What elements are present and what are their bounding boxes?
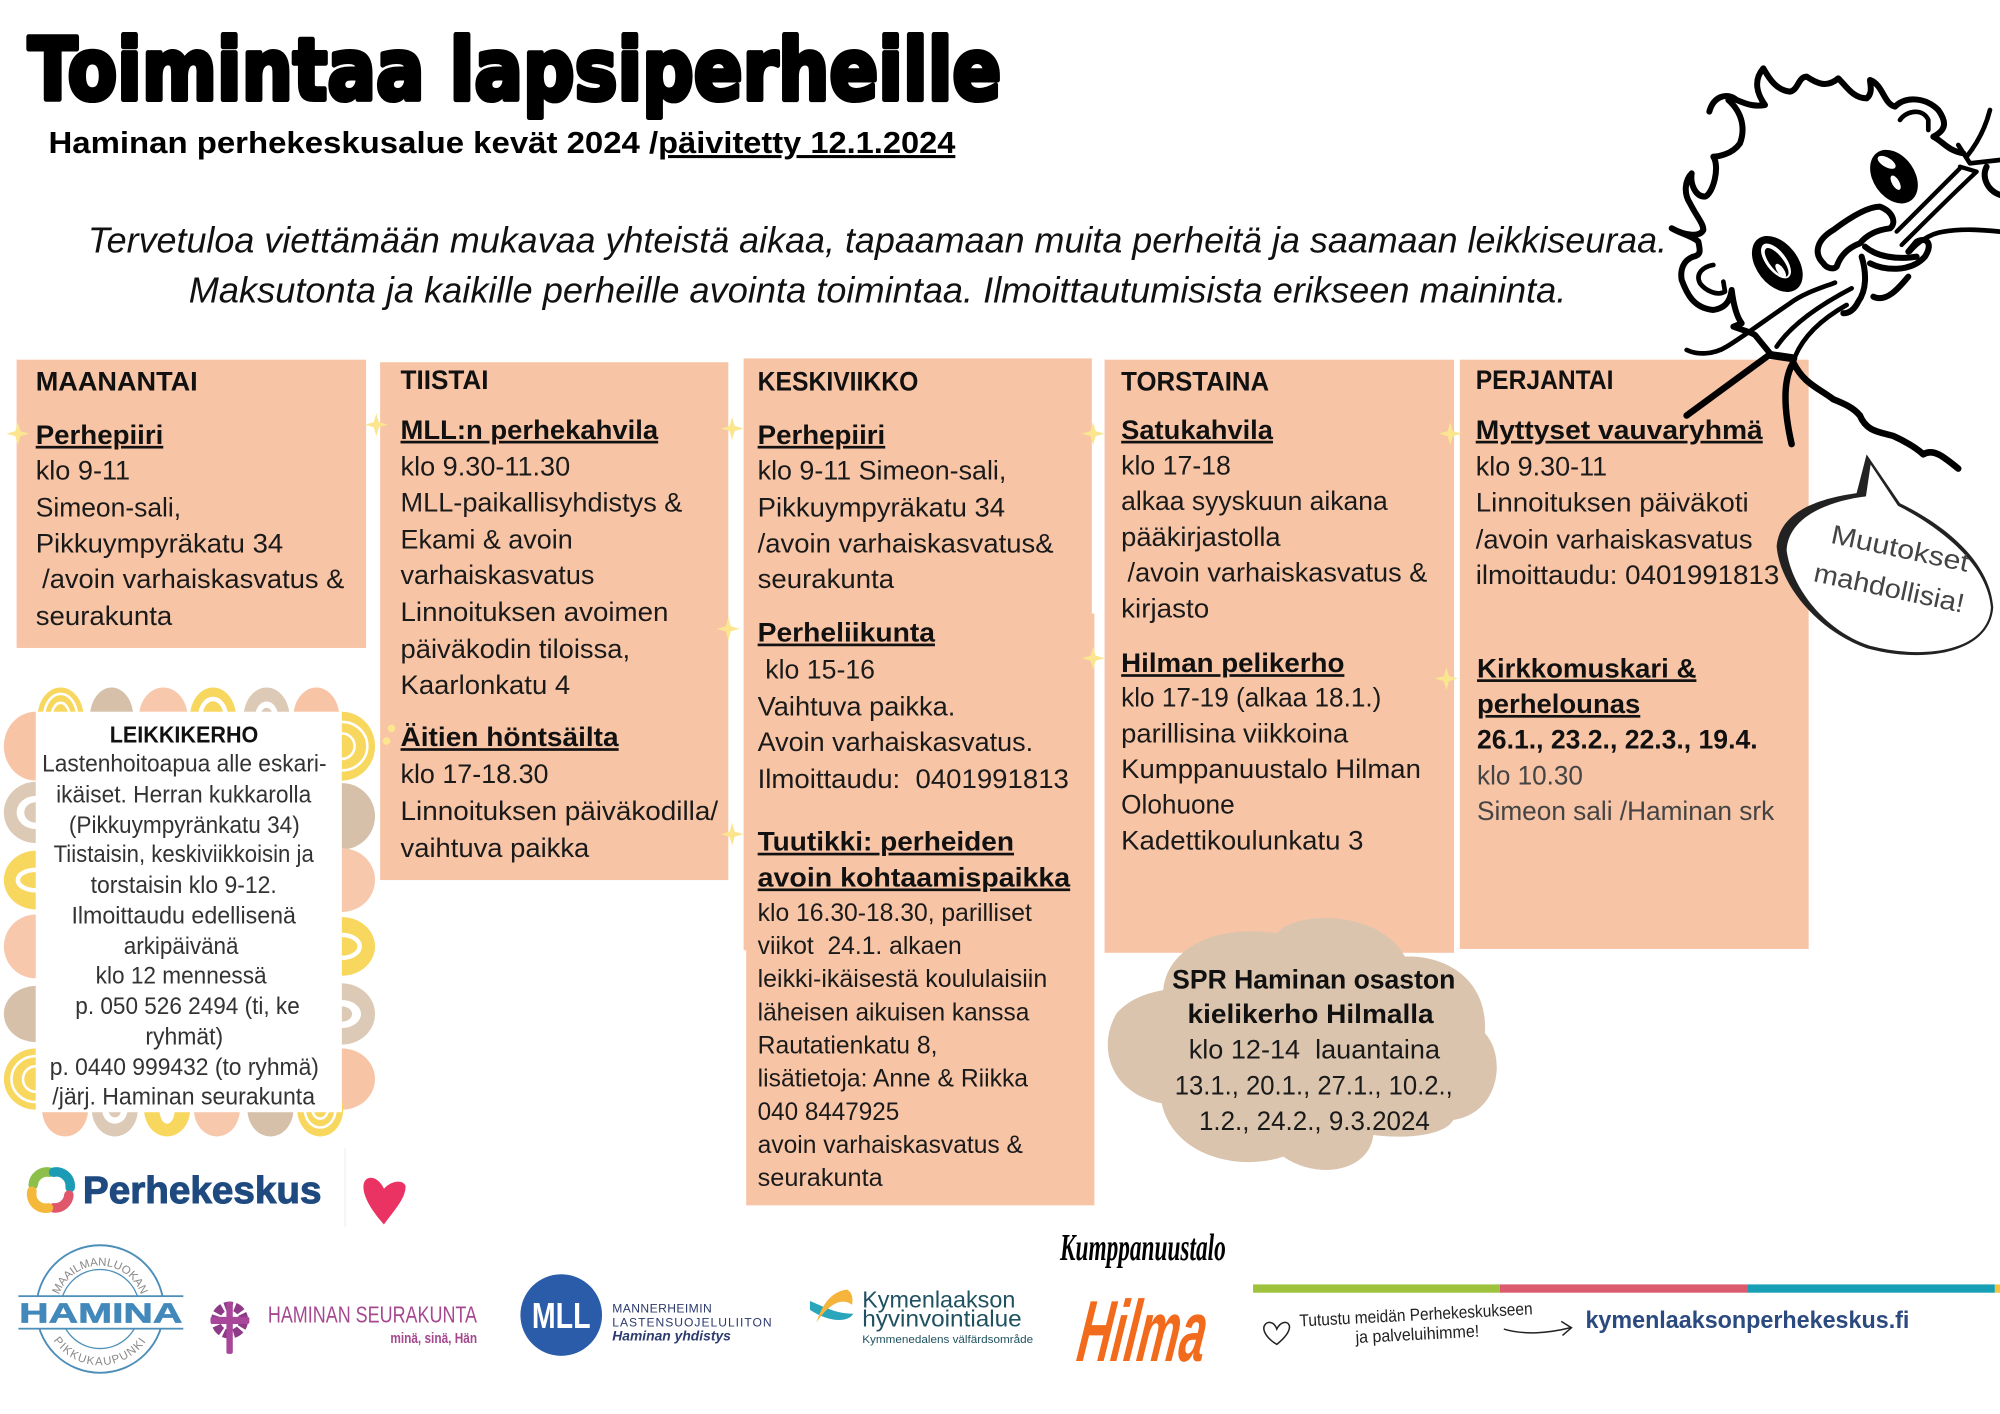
logo: Kumppanuustalo Hilma (1059, 1227, 1226, 1380)
logo: Kymenlaakson hyvinvointialue: hyvinvointialue (862, 1306, 1022, 1332)
panel: perjantai: klo 9.30-11 (1476, 452, 1607, 482)
panel: torstaina: /avoin varhaiskasvatus & (1128, 558, 1427, 588)
panel: keskiviikko: avoin varhaiskasvatus & (758, 1131, 1023, 1159)
panel: keskiviikko: lisätietoja: Anne & Riikka (758, 1065, 1028, 1093)
website banner: ja palveluihimme! (1354, 1321, 1480, 1347)
panel: leikkikerho: Lastenhoitoapua alle eskari- (42, 751, 327, 777)
panel: perjantai: 26.1., 23.2., 22.3., 19.4. (1477, 725, 1758, 755)
logo: Kymenlaakson hyvinvointialue: Kymmenedalens välfärdsområde (862, 1334, 1033, 1346)
panel: tiistai (380, 362, 728, 880)
panel: tiistai: Linnoituksen avoimen (401, 597, 668, 627)
logo: Haminan seurakunta: HAMINAN SEURAKUNTA (268, 1302, 478, 1328)
panel: keskiviikko: Perhepiiri (758, 420, 885, 450)
panel: tiistai: Kaarlonkatu 4 (401, 670, 570, 700)
website banner (1253, 1284, 2000, 1347)
logo: Kymenlaakson hyvinvointialue: Kymenlaakson (862, 1286, 1015, 1312)
logo: Hamina: PIKKUKAUPUNKI (54, 1336, 146, 1366)
logo: MLL (520, 1274, 772, 1356)
panel: torstaina: parillisina viikkoina (1121, 718, 1348, 748)
panel: leikkikerho: Ilmoittaudu edellisenä (71, 902, 297, 928)
panel: tiistai: klo 9.30-11.30 (401, 452, 570, 482)
panel: keskiviikko: seurakunta (758, 564, 894, 594)
website banner: Tutustu meidän Perhekeskukseen (1299, 1298, 1533, 1330)
panel: keskiviikko: klo 15-16 (765, 655, 875, 685)
panel: tiistai: vaihtuva paikka (401, 833, 589, 863)
logo: MLL: MANNERHEIMIN (612, 1301, 712, 1315)
panel: keskiviikko: Avoin varhaiskasvatus. (758, 727, 1033, 757)
panel: perjantai: /avoin varhaiskasvatus (1476, 524, 1753, 554)
callout: speech bubble (1777, 454, 1993, 655)
panel: keskiviikko: klo 16.30-18.30, parilliset (758, 899, 1032, 927)
panel: torstaina: klo 17-18 (1121, 450, 1231, 480)
panel: leikkikerho: LEIKKIKERHO (110, 721, 258, 747)
website banner: kymenlaaksonperhekeskus.fi (1585, 1307, 1909, 1334)
panel: leikkikerho (4, 687, 375, 1136)
panel: tiistai: Linnoituksen päiväkodilla/ (401, 796, 719, 826)
panel: leikkikerho: (Pikkuympyränkatu 34) (69, 812, 300, 838)
panel: tiistai: klo 17-18.30 (401, 759, 548, 789)
icon: sparkle stars (6, 413, 1462, 846)
panel: perjantai (1460, 360, 1809, 949)
icon: heart (344, 1148, 406, 1227)
panel: torstaina: Kumppanuustalo Hilman (1121, 754, 1421, 784)
panel: leikkikerho: arkipäivänä (124, 933, 239, 959)
panel: keskiviikko: leikki-ikäisestä koululaisiin (758, 965, 1047, 993)
panel: perjantai: PERJANTAI (1476, 365, 1614, 395)
panel: keskiviikko: Vaihtuva paikka. (758, 692, 955, 722)
panel: maanantai: Perhepiiri (36, 420, 163, 450)
panel: keskiviikko: /avoin varhaiskasvatus& (758, 528, 1054, 558)
subtitle (48, 126, 955, 160)
callout: SPR cloud: 1.2., 24.2., 9.3.2024 (1199, 1106, 1430, 1136)
logo: MLL: MLL (532, 1296, 591, 1336)
panel: tiistai: Äitien höntsäilta (401, 722, 620, 752)
panel: keskiviikko: Rautatienkatu 8, (758, 1032, 938, 1060)
panel: keskiviikko: avoin kohtaamispaikka (758, 862, 1071, 892)
panel: tiistai: päiväkodin tiloissa, (401, 634, 630, 664)
callout: SPR cloud: klo 12-14 lauantaina (1189, 1035, 1440, 1065)
panel: perjantai: perhelounas (1477, 689, 1640, 719)
callout: SPR cloud: 13.1., 20.1., 27.1., 10.2., (1175, 1070, 1453, 1100)
callout: speech bubble: Muutokset (1828, 519, 1973, 578)
panel: maanantai: klo 9-11 (36, 456, 130, 486)
logo: Perhekeskus: Perhekeskus (83, 1169, 321, 1212)
logo: Haminan seurakunta: minä, sinä, Hän (390, 1331, 477, 1347)
logo: MLL: Haminan yhdistys (612, 1329, 731, 1344)
logo: Hamina (18, 1244, 184, 1374)
callout: SPR cloud: SPR Haminan osaston (1172, 964, 1455, 994)
panel: perjantai: Simeon sali /Haminan srk (1477, 796, 1775, 826)
subtitle: Haminan perhekeskusalue kevät 2024 / (48, 126, 659, 160)
panel: perjantai: klo 10.30 (1477, 760, 1583, 790)
panel: leikkikerho: p. 050 526 2494 (ti, ke (75, 993, 300, 1019)
logo: Kymenlaakson hyvinvointialue (810, 1286, 1033, 1346)
panel: leikkikerho: /järj. Haminan seurakunta (52, 1084, 316, 1110)
panel: keskiviikko: Ilmoittaudu: 0401991813 (758, 764, 1069, 794)
panel: maanantai: seurakunta (36, 601, 172, 631)
intro text: Maksutonta ja kaikille perheille avointa toimintaa. Ilmoittautumisista erikseen maininta. (189, 269, 1566, 310)
panel: maanantai (17, 360, 366, 648)
panel: tiistai: Ekami & avoin (401, 524, 573, 554)
panel: perjantai: Linnoituksen päiväkoti (1476, 487, 1749, 517)
panel: torstaina: TORSTAINA (1121, 366, 1269, 396)
panel: keskiviikko: seurakunta (758, 1164, 883, 1192)
logo: Hamina: HAMINA (19, 1298, 182, 1329)
panel: perjantai: Myttyset vauvaryhmä (1476, 415, 1763, 445)
panel: leikkikerho: ryhmät) (145, 1024, 223, 1050)
intro text (88, 220, 1667, 310)
panel: torstaina: kirjasto (1121, 593, 1209, 623)
panel: keskiviikko: KESKIVIIKKO (758, 366, 918, 396)
panel: perjantai: Kirkkomuskari & (1477, 653, 1696, 683)
logo: Hamina: MAAILMANLUOKAN (52, 1258, 148, 1294)
panel: leikkikerho: klo 12 mennessä (96, 962, 267, 988)
panel: torstaina: alkaa syyskuun aikana (1121, 486, 1388, 516)
panel: maanantai: /avoin varhaiskasvatus & (42, 564, 345, 594)
panel: keskiviikko: Pikkuympyräkatu 34 (758, 493, 1005, 523)
illustration: child doodle (1672, 68, 2000, 469)
panel: tiistai: MLL:n perhekahvila (401, 415, 659, 445)
logo: Kumppanuustalo Hilma: Hilma (1073, 1283, 1214, 1380)
panel: perjantai: ilmoittaudu: 0401991813 (1476, 560, 1779, 590)
panel: keskiviikko: klo 9-11 Simeon-sali, (758, 456, 1006, 486)
panel: torstaina: Hilman pelikerho (1121, 648, 1344, 678)
panel: keskiviikko: Perheliikunta (758, 618, 936, 648)
panel: tiistai: MLL-paikallisyhdistys & (401, 487, 683, 517)
panel: keskiviikko: läheisen aikuisen kanssa (758, 998, 1029, 1026)
panel: keskiviikko: 040 8447925 (758, 1098, 899, 1126)
callout: SPR cloud: kielikerho Hilmalla (1187, 999, 1435, 1029)
logo: Kumppanuustalo Hilma: Kumppanuustalo (1059, 1227, 1226, 1269)
panel: maanantai: MAANANTAI (36, 366, 198, 396)
panel: leikkikerho: Tiistaisin, keskiviikkoisin ja (54, 841, 315, 867)
panel: maanantai: Pikkuympyräkatu 34 (36, 528, 283, 558)
subtitle: päivitetty 12.1.2024 (658, 126, 955, 160)
logo: MLL: LASTENSUOJELULIITON (612, 1316, 772, 1330)
panel: maanantai: Simeon-sali, (36, 493, 181, 523)
panel: torstaina: klo 17-19 (alkaa 18.1.) (1121, 683, 1381, 713)
callout: SPR cloud (1108, 918, 1497, 1170)
panel: leikkikerho: torstaisin klo 9-12. (91, 872, 277, 898)
panel: torstaina: Kadettikoulunkatu 3 (1121, 825, 1364, 855)
panel: keskiviikko (744, 358, 1094, 1205)
pebble frame (4, 687, 375, 1136)
panel: torstaina: Satukahvila (1121, 415, 1274, 445)
title: Toimintaa lapsiperheille (28, 21, 1001, 120)
panel: tiistai: varhaiskasvatus (401, 560, 594, 590)
panel: leikkikerho: ikäiset. Herran kukkarolla (56, 781, 312, 807)
logo: Haminan seurakunta (210, 1302, 478, 1354)
panel: torstaina: Olohuone (1121, 790, 1235, 820)
panel: tiistai: TIISTAI (401, 365, 489, 395)
panel: torstaina (1105, 360, 1454, 953)
panel: torstaina: pääkirjastolla (1121, 522, 1281, 552)
panel: leikkikerho: p. 0440 999432 (to ryhmä) (50, 1054, 319, 1080)
panel: keskiviikko: Tuutikki: perheiden (758, 827, 1014, 857)
callout: speech bubble: mahdollisia! (1811, 558, 1967, 619)
panel: keskiviikko: viikot 24.1. alkaen (758, 932, 962, 960)
intro text: Tervetuloa viettämään mukavaa yhteistä aikaa, tapaamaan muita perheitä ja saamaan leikkiseuraa. (88, 220, 1667, 261)
